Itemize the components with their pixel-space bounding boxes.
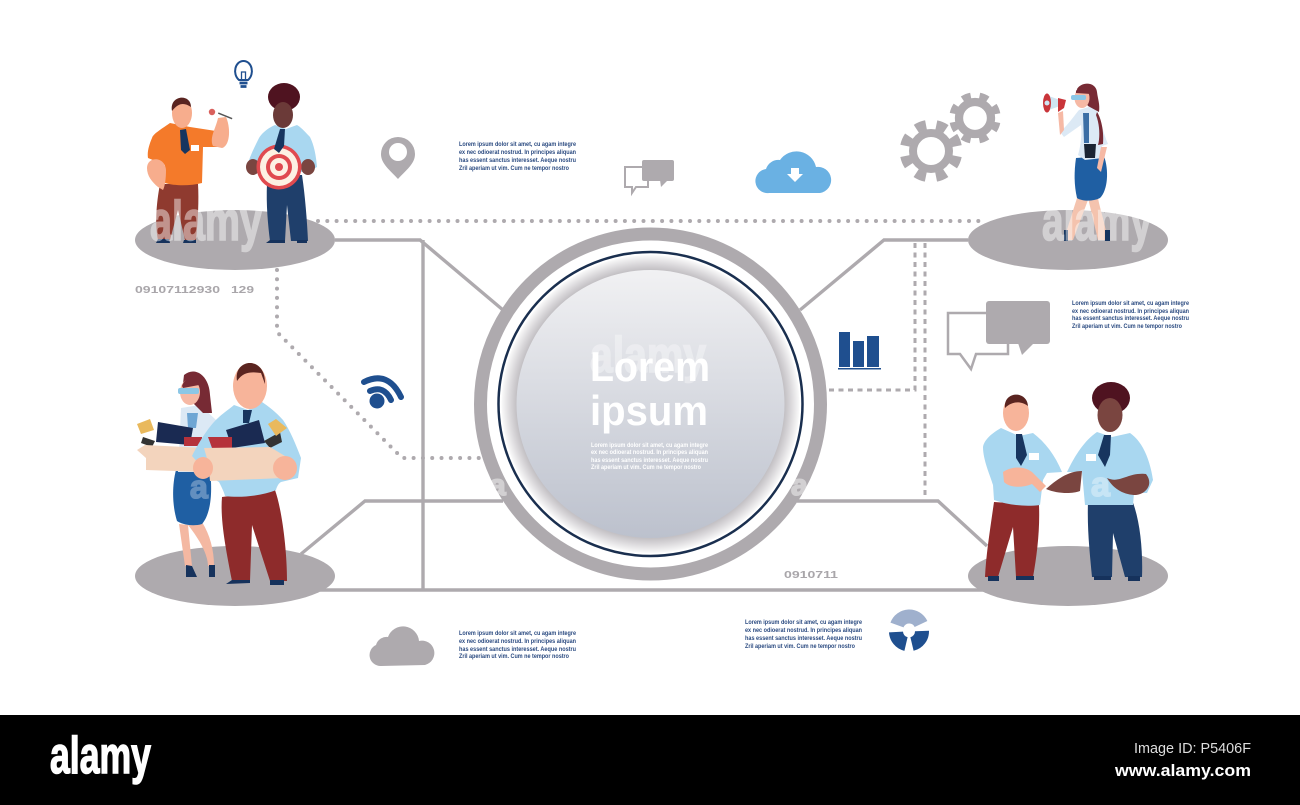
- text block: right: Lorem ipsum dolor sit amet, cu agam integre: [1072, 301, 1190, 307]
- watermark: bottom left letter: a: [190, 469, 208, 505]
- figure: woman with megaphone: [1043, 84, 1110, 241]
- central circle: ipsum: [590, 387, 708, 434]
- text block: bottom middle: ex nec odioerat nostrud. In principes aliquan: [745, 628, 862, 634]
- figure: man with target: [246, 83, 317, 243]
- box contents right: [208, 419, 287, 448]
- text block: bottom left: Lorem ipsum dolor sit amet, cu agam integre: [459, 631, 577, 637]
- text block: right: Zril aperiam ut vim. Cum ne tempor nostro: [1072, 324, 1182, 330]
- text block: bottom middle: has essent sanctus interesset. Aeque nostru: [745, 636, 862, 642]
- figure: woman with box: [137, 372, 216, 577]
- box right: [204, 447, 285, 481]
- dotted connectors: [277, 221, 985, 498]
- central text: has essent sanctus interesset. Aeque nostru: [591, 458, 708, 464]
- platform: top right: [968, 210, 1168, 270]
- central text: ex nec odioerat nostrud. In principes aliquan: [591, 450, 708, 456]
- footer logo: alamy: [50, 727, 151, 785]
- figure: man shaking hands, right: [1046, 382, 1153, 581]
- text block: bottom left: has essent sanctus interesset. Aeque nostru: [459, 647, 576, 653]
- icon: wifi: [364, 378, 401, 408]
- icon: grey cloud: [370, 626, 434, 666]
- text block: bottom left: Zril aperiam ut vim. Cum ne tempor nostro: [459, 654, 569, 660]
- connector lines: [301, 240, 987, 590]
- text block: top: Zril aperiam ut vim. Cum ne tempor nostro: [459, 166, 569, 172]
- image id: Image ID: P5406F: [1134, 741, 1251, 757]
- number label left suffix: 129: [231, 285, 255, 296]
- text block: bottom middle: [745, 620, 863, 650]
- watermark: alamy: [590, 327, 706, 383]
- target: [256, 144, 302, 190]
- icon: bar chart: [838, 332, 881, 370]
- icon: light bulb: [235, 61, 252, 86]
- watermark: ring left: a: [489, 469, 506, 502]
- text block: bottom middle: Lorem ipsum dolor sit amet, cu agam integre: [745, 620, 863, 626]
- central text: [591, 443, 709, 471]
- icon: recycle: [896, 616, 922, 644]
- watermark: ring right: a: [791, 469, 808, 502]
- number label left: 09107112930: [135, 285, 221, 296]
- figure: man in orange with dart: [147, 98, 232, 243]
- text block: right: ex nec odioerat nostrud. In principes aliquan: [1072, 309, 1189, 315]
- text block: bottom left: [459, 631, 577, 660]
- number label bottom: 0910711: [784, 570, 839, 581]
- icon: gears: [900, 92, 1001, 182]
- text block: bottom middle: Zril aperiam ut vim. Cum ne tempor nostro: [745, 644, 855, 650]
- figure: man shaking hands, left: [983, 395, 1062, 581]
- text block: top: [459, 142, 577, 172]
- figure: man with box: [192, 363, 301, 585]
- text block: bottom left: ex nec odioerat nostrud. In principes aliquan: [459, 639, 576, 645]
- box contents left: [137, 419, 202, 447]
- text block: right: [1072, 301, 1190, 330]
- central heading: Lorem: [590, 343, 710, 390]
- central circle: [480, 234, 820, 574]
- platform: top left: [135, 210, 335, 270]
- central text: Lorem ipsum dolor sit amet, cu agam integre: [591, 443, 709, 449]
- icon: large speech bubbles: [948, 301, 1050, 369]
- watermark: top right: alamy: [1042, 189, 1152, 252]
- central text: Zril aperiam ut vim. Cum ne tempor nostro: [591, 465, 701, 471]
- megaphone: [1043, 94, 1066, 112]
- icon: download cloud: [755, 151, 831, 193]
- platform: bottom left: [135, 546, 335, 606]
- text block: top: Lorem ipsum dolor sit amet, cu agam integre: [459, 142, 577, 148]
- box left: [137, 445, 205, 472]
- icon: map pin: [381, 137, 415, 179]
- watermark: top left: alamy: [150, 189, 262, 252]
- icon: small chat bubbles: [625, 160, 674, 193]
- text block: right: has essent sanctus interesset. Aeque nostru: [1072, 316, 1189, 322]
- footer bar: [0, 715, 1300, 805]
- watermark: bottom right letter: a: [1091, 466, 1111, 504]
- website: www.alamy.com: [1114, 761, 1251, 780]
- platform: bottom right: [968, 546, 1168, 606]
- text block: top: has essent sanctus interesset. Aeque nostru: [459, 158, 576, 164]
- text block: top: ex nec odioerat nostrud. In principes aliquan: [459, 150, 576, 156]
